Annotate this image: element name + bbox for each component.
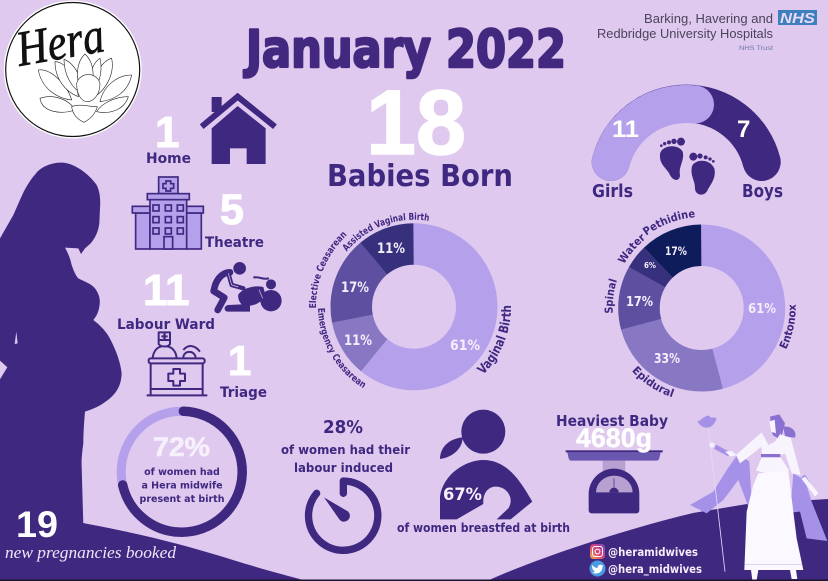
stat: new pregnancies booked: 19 [16, 504, 58, 545]
donut chart: pain relief: Spinal [604, 278, 617, 313]
donut chart: pain relief: 17% [626, 294, 653, 310]
donut chart: pain relief: 33% [654, 351, 680, 367]
stat: new pregnancies booked [5, 504, 177, 562]
big number: 18 babies born [327, 72, 513, 194]
stat: labour ward births: Labour Ward [117, 317, 215, 333]
stat: labour induced: labour induced [294, 460, 393, 475]
donut chart: mode of birth: 11% [344, 333, 372, 349]
gauge: girls and boys: Boys [742, 181, 783, 202]
NHS trust logo: Barking, Havering and [644, 12, 773, 26]
icon: house [202, 97, 275, 164]
donut chart: pain relief: Entonox [779, 304, 796, 349]
illustration: goddess Hera [690, 414, 827, 580]
social handles [590, 544, 702, 577]
stat: triage births [147, 332, 267, 401]
stat: labour ward births: 11 [143, 266, 190, 315]
NHS trust logo [597, 10, 817, 52]
stat: home births [146, 97, 275, 167]
logo: Hera [4, 0, 142, 138]
stat: theatre births: 5 [220, 186, 244, 234]
stat: heaviest baby: 4680g [576, 423, 652, 453]
icon: twitter [590, 560, 606, 576]
icon: instagram [590, 544, 605, 559]
title: January 2022 [244, 20, 566, 80]
ground hill right [487, 499, 828, 581]
ring: Hera midwife present [119, 409, 244, 534]
donut chart: pain relief: 17% [665, 244, 687, 258]
donut chart: pain relief: Water [617, 234, 644, 263]
stat: labour ward births [117, 262, 282, 333]
stat: breastfed: of women breastfed at birth [397, 520, 570, 535]
ground wave left [0, 518, 307, 581]
stat: labour induced: of women had their [281, 442, 411, 457]
big number: 18 babies born: Babies Born [327, 159, 513, 194]
logo: Hera: Hera [11, 6, 108, 77]
donut chart: pain relief: 6% [644, 261, 656, 270]
stat: home births: Home [146, 151, 191, 167]
stat: heaviest baby: Heaviest Baby [556, 412, 668, 430]
donut chart: mode of birth [308, 212, 511, 390]
stat: triage births: 1 [228, 337, 251, 384]
icon: baby feet [660, 138, 715, 195]
donut chart: mode of birth: Elective Ceasarean [308, 232, 347, 308]
stat: labour induced: 28% [323, 417, 363, 438]
stat: new pregnancies booked: new pregnancies booked [5, 543, 177, 562]
NHS trust logo: NHS Trust [739, 45, 773, 52]
ring: Hera midwife present: present at birth [140, 494, 225, 505]
donut chart: mode of birth: Assisted Vaginal Birth [342, 212, 429, 252]
icon: labour position [214, 262, 282, 312]
ring: Hera midwife present: of women had [144, 467, 220, 478]
ring: Hera midwife present: a Hera midwife [141, 480, 223, 492]
gauge: girls and boys [592, 104, 783, 202]
icon: lotus [38, 54, 132, 122]
gauge: girls and boys: 7 [737, 116, 750, 143]
donut chart: mode of birth: Vaginal Birth [476, 306, 511, 373]
donut chart: pain relief: Epidural [632, 366, 674, 397]
donut chart: pain relief: Pethidine [642, 211, 695, 236]
donut chart: mode of birth: 61% [450, 338, 480, 354]
social handles: @hera_midwives [608, 562, 702, 577]
donut chart: mode of birth: 17% [341, 280, 369, 296]
silhouette of pregnant woman [0, 163, 122, 581]
donut chart: mode of birth: 11% [377, 241, 405, 257]
icon: weighing scale [566, 450, 663, 513]
ring: Hera midwife present: 72% [153, 432, 210, 462]
donut chart: pain relief: 61% [748, 301, 776, 317]
donut chart: pain relief [604, 211, 796, 397]
stat: home births: 1 [155, 108, 179, 157]
stat: breastfed: 67% [443, 485, 482, 505]
stat: theatre births [132, 177, 264, 251]
gauge: girls and boys: Girls [592, 181, 633, 202]
icon: breastfeeding mother [440, 410, 532, 519]
icon: timer [309, 481, 378, 550]
stat: labour induced [281, 417, 411, 550]
stat: heaviest baby [556, 412, 668, 513]
stat: theatre births: Theatre [205, 235, 264, 251]
icon: hospital [132, 177, 203, 249]
NHS trust logo: Redbridge University Hospitals [597, 27, 773, 41]
big number: 18 babies born: 18 [366, 72, 466, 174]
gauge: girls and boys: 11 [612, 116, 639, 143]
stat: triage births: Triage [220, 385, 267, 401]
donut chart: mode of birth: Emergency Ceasarean [318, 308, 366, 388]
stat: breastfed [397, 410, 570, 535]
NHS trust logo: NHS [780, 11, 815, 27]
social handles: @heramidwives [608, 545, 698, 559]
icon: reception desk [147, 332, 207, 395]
